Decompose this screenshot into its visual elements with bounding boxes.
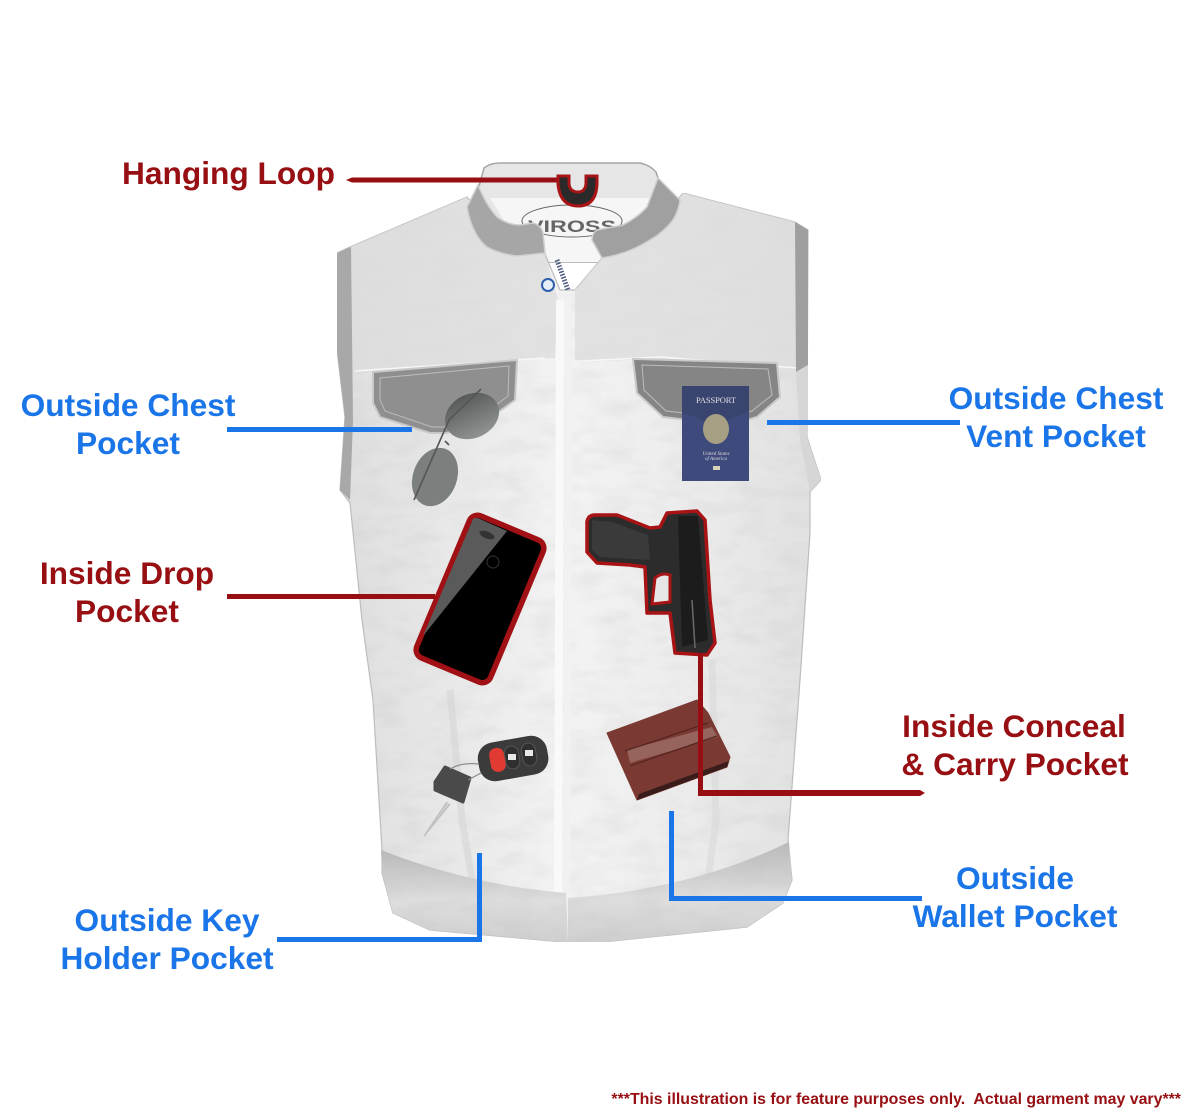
label: Outside Key Holder Pocket: Holder Pocket — [60, 940, 274, 976]
icon: passport — [682, 386, 749, 481]
vest body — [337, 193, 821, 942]
icon: passport: PASSPORT — [696, 395, 737, 405]
shoulder yoke shading — [350, 193, 796, 370]
icon: pistol — [587, 511, 715, 655]
icon: passport: United States — [703, 452, 729, 457]
label: Outside Chest Pocket: Outside Chest — [21, 387, 236, 423]
icon: sunglasses — [404, 384, 507, 513]
left chest pocket — [373, 360, 517, 433]
leader: inside drop pocket — [227, 594, 435, 599]
leader: hanging loop — [346, 176, 597, 206]
right armhole trim — [795, 222, 808, 372]
front placket — [554, 300, 566, 940]
zipper — [557, 260, 568, 290]
icon: wallet — [607, 700, 730, 800]
back of collar — [478, 163, 662, 262]
icon: phone — [413, 513, 547, 685]
snap button — [542, 279, 554, 291]
label: Outside Chest Vent Pocket: Outside Chest — [949, 380, 1164, 416]
icon: passport: of America — [705, 457, 727, 462]
label: Inside Conceal & Carry Pocket: Inside Conceal — [902, 708, 1126, 744]
leader: outside chest vent pocket — [767, 420, 960, 425]
leader: inside conceal and carry pocket — [698, 653, 925, 796]
icon: car key and fob — [424, 733, 551, 836]
label: Outside Chest Vent Pocket: Vent Pocket — [966, 418, 1146, 454]
hem band — [381, 850, 568, 942]
label: Outside Chest Pocket: Pocket — [76, 425, 180, 461]
label: Outside Wallet Pocket: Outside — [956, 860, 1074, 896]
collar left — [467, 185, 545, 256]
label: Inside Drop Pocket: Pocket — [75, 593, 179, 629]
collar label: VIROSS — [528, 217, 616, 236]
left armhole trim — [337, 247, 353, 500]
collar right — [592, 178, 680, 258]
label: Inside Drop Pocket: Inside Drop — [40, 555, 214, 591]
disclaimer: ***This illustration is for feature purposes only. Actual garment may vary*** — [611, 1091, 1182, 1108]
right chest pocket — [633, 359, 780, 425]
leader: outside chest pocket — [227, 427, 412, 432]
label: Outside Wallet Pocket: Wallet Pocket — [913, 898, 1118, 934]
label: Inside Conceal & Carry Pocket: & Carry Pocket — [901, 746, 1129, 782]
label: Outside Key Holder Pocket: Outside Key — [75, 902, 260, 938]
leader: outside wallet pocket — [669, 811, 922, 901]
collar label — [522, 205, 622, 237]
heading: Hanging Loop: Hanging Loop — [122, 155, 335, 191]
yoke seam — [355, 357, 797, 371]
leader: outside key holder pocket — [277, 853, 482, 942]
vest illustration — [337, 163, 821, 942]
